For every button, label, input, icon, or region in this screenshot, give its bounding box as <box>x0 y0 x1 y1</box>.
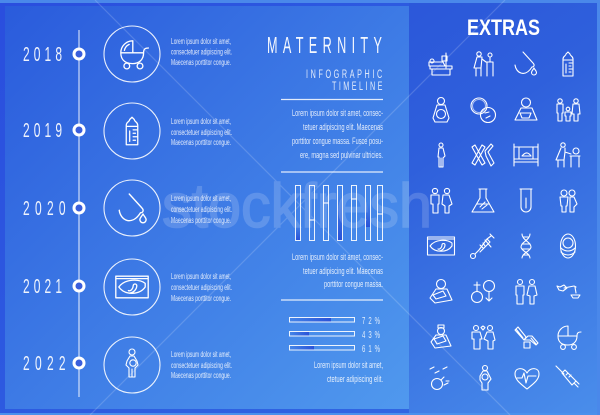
title: TIMELINE <box>332 80 383 94</box>
text block 2018: consectetuer adipiscing elit. <box>171 46 232 56</box>
paragraph: chart caption: tetuer adipiscing elit. Maecenas <box>303 266 383 276</box>
text block 2022: Maecenas porttitor congue. <box>171 370 231 380</box>
year 2019: 2019 <box>23 120 62 142</box>
text block 2021: Lorem ipsum dolor sit amet, <box>171 271 231 281</box>
icon: parent at changing table <box>556 143 580 167</box>
icon: breast and drop <box>515 52 536 75</box>
text block 2020 <box>171 193 232 225</box>
icon: flask <box>472 189 494 212</box>
icon: test tube <box>520 189 532 212</box>
year 2020: 2020 <box>23 198 66 220</box>
panel: extras icon grid <box>428 52 581 390</box>
icon: egg cell <box>471 98 496 122</box>
icon: baby bottle <box>563 52 573 76</box>
year 2022: 2022 <box>23 353 66 375</box>
text block 2018: Lorem ipsum dolor sit amet, <box>171 36 231 46</box>
icon: baby carriage <box>558 326 581 349</box>
chart: progress bars: 43% <box>362 330 380 340</box>
icon: newborn <box>560 234 576 258</box>
icon: person with baby <box>515 98 537 120</box>
icon: stroller in circle <box>104 26 160 82</box>
year 2022 <box>23 353 84 375</box>
paragraph: chart caption: Lorem ipsum dolor sit amet, consec- <box>292 252 383 262</box>
text block 2022 <box>171 349 232 380</box>
year 2021 <box>23 276 84 298</box>
panel: main timeline background <box>5 6 409 409</box>
text block 2018: Maecenas porttitor congue. <box>171 57 231 67</box>
title: INFOGRAPHIC <box>306 68 382 82</box>
text block 2021 <box>171 271 232 303</box>
paragraph: closing: ctetuer adipiscing elit. <box>327 374 383 384</box>
icon: couple in love <box>472 326 495 349</box>
paragraph: closing: Lorem ipsum dolor sit amet, <box>314 360 383 370</box>
text block 2021: Maecenas porttitor congue. <box>171 293 231 303</box>
icon: heart with pulse <box>515 369 539 389</box>
icon: pregnant woman standing <box>438 143 445 167</box>
icon: doctor and child <box>474 52 493 76</box>
chart: vertical bars <box>295 186 383 240</box>
year 2020 <box>23 198 84 220</box>
timeline axis <box>78 30 80 397</box>
icon: bottle in circle <box>104 103 160 159</box>
icon: stork <box>557 285 580 298</box>
icon: sperm and egg <box>430 367 449 390</box>
title <box>267 32 383 94</box>
paragraph: closing <box>314 360 383 384</box>
text block 2021: consectetuer adipiscing elit. <box>171 282 232 292</box>
chart: progress bars <box>290 316 380 354</box>
icon: family <box>557 99 580 121</box>
icon: gender symbols <box>472 280 494 302</box>
text block 2022: Lorem ipsum dolor sit amet, <box>171 349 231 359</box>
text block 2019: Maecenas porttitor congue. <box>171 137 231 147</box>
title: MATERNITY <box>267 32 382 58</box>
icon: crib <box>514 144 538 166</box>
icon: pregnant belly <box>433 98 449 122</box>
icon: breast with drop in circle <box>104 180 160 236</box>
icon: nurse holding baby <box>430 280 452 303</box>
text block 2019 <box>171 116 232 147</box>
paragraph: intro: Lorem ipsum dolor sit amet, consec- <box>292 108 383 118</box>
year 2018 <box>23 44 84 66</box>
text block 2020: Maecenas porttitor congue. <box>171 215 231 225</box>
icon: two parents <box>560 190 577 212</box>
paragraph: chart caption: porttitor congue massa. <box>324 279 383 289</box>
icon: expecting mother <box>480 366 491 390</box>
text block 2020: consectetuer adipiscing elit. <box>171 204 232 214</box>
icon: syringe <box>470 234 494 258</box>
text block 2022: consectetuer adipiscing elit. <box>171 360 232 370</box>
icon: hospital bed <box>429 53 452 75</box>
icon: dental chair <box>515 327 538 348</box>
chart: progress bars: 61% <box>362 344 380 354</box>
icon: dna <box>521 234 531 258</box>
year 2018: 2018 <box>23 44 62 66</box>
chart: progress bars: 72% <box>362 316 380 326</box>
icon: man and woman <box>516 280 537 304</box>
paragraph: intro: porttitor congue massa. Fusce posu- <box>292 136 383 146</box>
paragraph: intro: ere, magna sed pulvinar ultricies. <box>300 150 383 160</box>
icon: ultrasound monitor <box>428 237 454 255</box>
text block 2020: Lorem ipsum dolor sit amet, <box>171 193 231 203</box>
text block 2019: Lorem ipsum dolor sit amet, <box>171 116 231 126</box>
paragraph: intro: tetuer adipiscing elit. Maecenas <box>303 122 383 132</box>
heading: extras: EXTRAS <box>467 15 540 40</box>
icon: chromosomes <box>472 144 494 166</box>
icon: injection needle <box>556 366 579 387</box>
paragraph: intro <box>292 108 383 160</box>
year 2021: 2021 <box>23 276 62 298</box>
icon: pregnant woman in circle <box>104 337 160 393</box>
panel: timeline <box>23 26 232 397</box>
text block 2019: consectetuer adipiscing elit. <box>171 127 232 137</box>
watermark: stockfresh <box>162 172 432 241</box>
icon: nurse with baby <box>431 325 451 348</box>
icon: couple expecting <box>431 188 452 213</box>
text block 2018 <box>171 36 232 67</box>
paragraph: chart caption <box>292 252 383 289</box>
year 2019 <box>23 120 84 142</box>
icon: ultrasound in circle <box>104 259 160 315</box>
